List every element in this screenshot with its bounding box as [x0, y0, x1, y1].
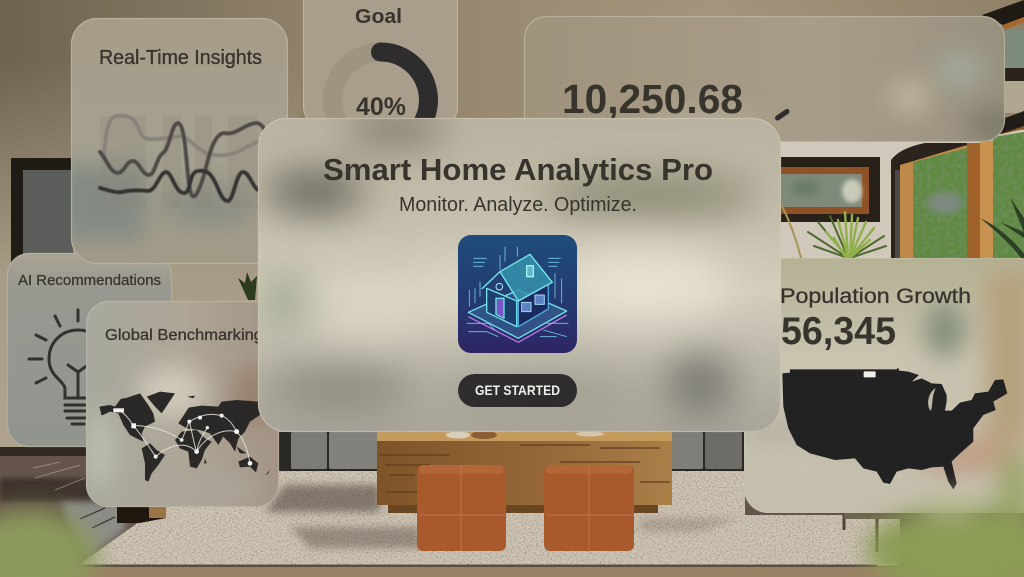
- foreground blurred foliage: [0, 450, 1024, 577]
- heading: AI recommendations: AI Recommendations: [18, 272, 161, 289]
- panel: real-time insights: [60, 18, 288, 264]
- furniture leg: [117, 505, 166, 523]
- donut value: 40%: [356, 93, 406, 121]
- floor: [0, 455, 1024, 577]
- panel: main hero: [258, 114, 781, 432]
- button: get started: GET STARTED: [475, 382, 560, 398]
- sofa: [291, 432, 742, 469]
- panel: stat value: [524, 16, 1024, 143]
- stat number: 10,250.68: [562, 76, 743, 122]
- panel: global benchmarking: [86, 301, 279, 507]
- heading: population growth: Population Growth: [780, 285, 971, 308]
- population number: 56,345: [781, 310, 896, 353]
- doorway: [11, 158, 73, 268]
- world map: [99, 392, 270, 482]
- floorboards strip: [0, 567, 1024, 577]
- US map: [782, 367, 1007, 489]
- panel: population growth: [744, 258, 1024, 513]
- heading: goal: Goal: [355, 6, 402, 28]
- heading: real-time insights: Real-Time Insights: [99, 47, 262, 69]
- panel: AI recommendations: [7, 253, 172, 447]
- large window: [891, 124, 1024, 264]
- small plant behind panels: [238, 272, 257, 300]
- small window: [781, 157, 880, 222]
- rug: [77, 471, 900, 566]
- leather ottomans: [417, 465, 634, 551]
- line chart: [100, 116, 265, 201]
- plant: [782, 206, 886, 258]
- side table legs: [844, 513, 969, 552]
- donut chart: 40%: [332, 52, 428, 148]
- heading: global benchmarking: Global Benchmarking: [105, 327, 263, 344]
- panel: goal: [302, 0, 458, 118]
- button: get started: [458, 374, 577, 407]
- subtitle: Monitor. Analyze. Optimize.: [399, 194, 637, 216]
- gauge tick: [778, 112, 787, 118]
- icon: smart home app: [458, 235, 577, 353]
- title: Smart Home Analytics Pro: [323, 152, 713, 187]
- upper right corner beam: [982, 0, 1024, 134]
- icon: light bulb: [29, 310, 107, 424]
- wooden console: [377, 431, 672, 513]
